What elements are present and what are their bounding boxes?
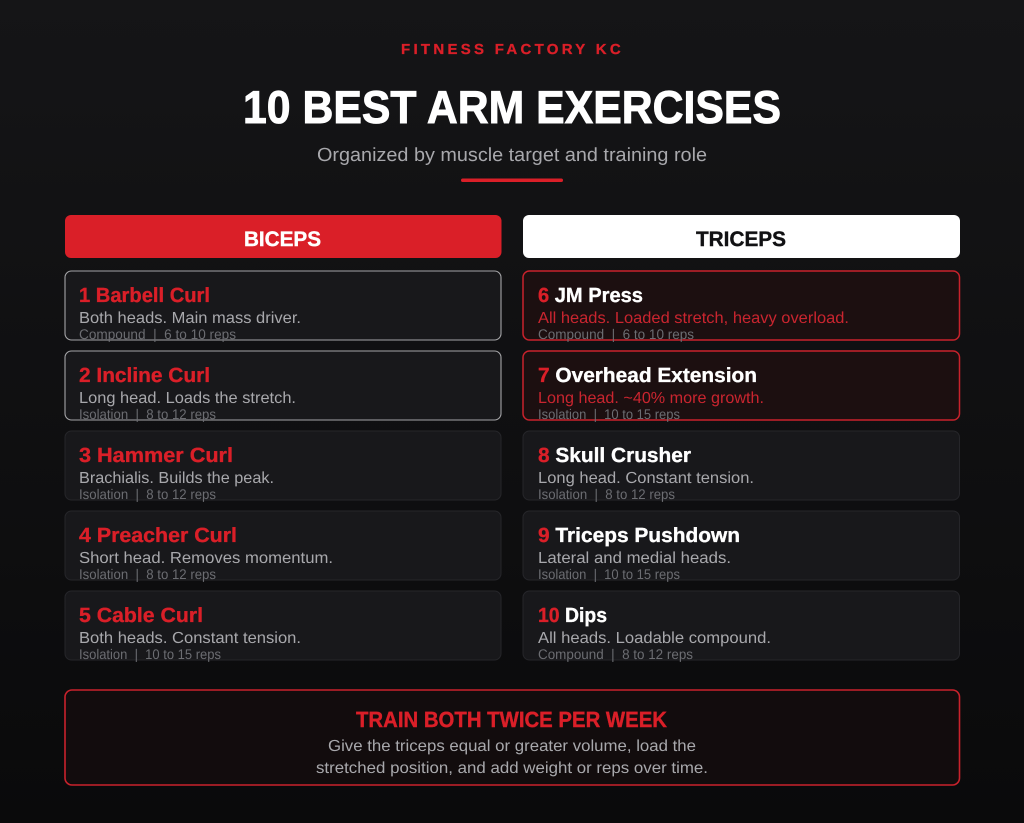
card: 3 Hammer Curl: Isolation | 8 to 12 reps (79, 486, 216, 502)
card: 10 Dips: All heads. Loadable compound. (538, 630, 771, 647)
card: 7 Overhead Extension (523, 351, 960, 422)
card: 9 Triceps Pushdown: 9 Triceps Pushdown (538, 524, 740, 547)
card: 7 Overhead Extension: Isolation | 10 to 15 reps (538, 406, 680, 422)
card: 1 Barbell Curl: Compound | 6 to 10 reps (79, 326, 236, 342)
brand eyebrow: FITNESS FACTORY KC (401, 42, 624, 58)
card: 8 Skull Crusher: Long head. Constant tension. (538, 470, 754, 487)
panel: triceps column (523, 215, 960, 662)
card: 1 Barbell Curl: 1 Barbell Curl (79, 284, 210, 307)
card: 2 Incline Curl (65, 351, 501, 422)
card: 9 Triceps Pushdown: Isolation | 10 to 15 reps (538, 566, 680, 582)
triceps header: TRICEPS (696, 228, 786, 251)
card: 5 Cable Curl: Isolation | 10 to 15 reps (79, 646, 221, 662)
card: 1 Barbell Curl (65, 271, 501, 342)
panel: biceps column (65, 215, 502, 662)
title: 10 BEST ARM EXERCISES (243, 81, 781, 133)
card: 8 Skull Crusher (523, 431, 960, 502)
card: 6 JM Press: All heads. Loaded stretch, heavy overload. (538, 310, 849, 327)
card: 2 Incline Curl: Long head. Loads the stretch. (79, 390, 296, 407)
card: 3 Hammer Curl: Brachialis. Builds the peak. (79, 470, 274, 487)
card: 3 Hammer Curl (65, 431, 501, 502)
callout: training advice: stretched position, and add weight or reps over time. (316, 760, 708, 777)
biceps header: BICEPS (244, 228, 321, 251)
card: 2 Incline Curl: Isolation | 8 to 12 reps (79, 406, 216, 422)
callout: training advice: Give the triceps equal or greater volume, load the (328, 738, 696, 755)
callout: training advice (65, 690, 960, 785)
callout: training advice: TRAIN BOTH TWICE PER WEEK (356, 707, 667, 732)
card: 5 Cable Curl: 5 Cable Curl (79, 604, 203, 627)
card: 9 Triceps Pushdown: Lateral and medial heads. (538, 550, 731, 567)
card: 10 Dips (523, 591, 960, 662)
card: 9 Triceps Pushdown (523, 511, 960, 582)
card: 1 Barbell Curl: Both heads. Main mass driver. (79, 310, 301, 327)
card: 4 Preacher Curl: 4 Preacher Curl (79, 524, 237, 547)
triceps header (523, 215, 960, 258)
card: 7 Overhead Extension: Long head. ~40% more growth. (538, 390, 764, 407)
card: 10 Dips: 10 Dips (538, 604, 607, 627)
card: 5 Cable Curl (65, 591, 501, 662)
title underline accent (461, 178, 563, 182)
card: 4 Preacher Curl: Isolation | 8 to 12 reps (79, 566, 216, 582)
card: 7 Overhead Extension: 7 Overhead Extension (538, 364, 757, 387)
card: 10 Dips: Compound | 8 to 12 reps (538, 646, 693, 662)
card: 6 JM Press: 6 JM Press (538, 284, 643, 307)
card: 4 Preacher Curl: Short head. Removes momentum. (79, 550, 333, 567)
card: 5 Cable Curl: Both heads. Constant tension. (79, 630, 301, 647)
card: 6 JM Press: Compound | 6 to 10 reps (538, 326, 694, 342)
card: 8 Skull Crusher: Isolation | 8 to 12 reps (538, 486, 675, 502)
card: 8 Skull Crusher: 8 Skull Crusher (538, 444, 691, 467)
card: 6 JM Press (523, 271, 960, 342)
subtitle: Organized by muscle target and training role (317, 145, 707, 166)
card: 2 Incline Curl: 2 Incline Curl (79, 364, 210, 387)
biceps header (65, 215, 502, 258)
card: 3 Hammer Curl: 3 Hammer Curl (79, 444, 233, 467)
card: 4 Preacher Curl (65, 511, 501, 582)
